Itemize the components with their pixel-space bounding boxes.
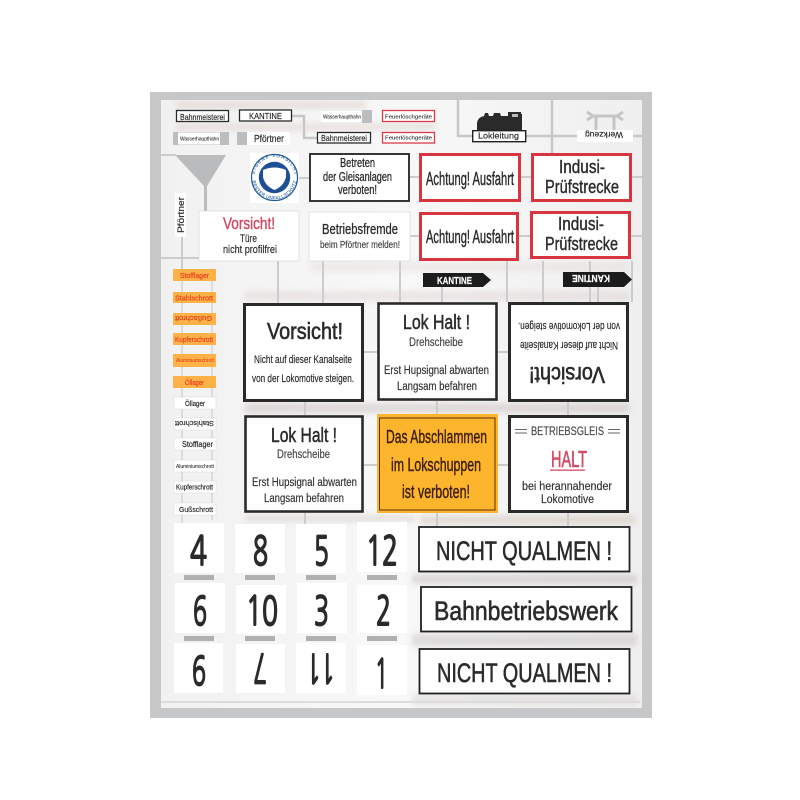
sign: Vorsicht Türe nicht profilfrei bbox=[199, 211, 299, 261]
plate 1 bbox=[357, 645, 407, 695]
small sign: KANTINE: KANTINE bbox=[249, 111, 282, 121]
sign: Lok Halt top: Langsam befahren bbox=[397, 381, 477, 393]
plate 11 inverted bbox=[296, 643, 346, 693]
sign: Betriebsfremde: Betriebsfremde bbox=[322, 221, 398, 238]
sign: Vorsicht Kanalseite: Nicht auf dieser Kanalseite bbox=[254, 354, 352, 366]
plate 6 row three: 6 bbox=[192, 651, 206, 691]
sign: Vorsicht Kanalseite inverted: Nicht auf dieser Kanalseite bbox=[520, 339, 618, 351]
arrow sign: KANTINE: KANTINE bbox=[437, 275, 472, 287]
label: Stofflager white: Stofflager bbox=[182, 440, 213, 449]
label: Stofflager orange: Stofflager bbox=[180, 271, 209, 280]
arrow sign: KANTINE inverted bbox=[563, 272, 632, 287]
sign: Das Abschlammen orange: Das Abschlammen bbox=[386, 427, 487, 447]
column: white labels bbox=[174, 397, 216, 515]
label: Kupferschrott orange: Kupferschrott bbox=[175, 337, 213, 344]
label: Stahlschrott white inverted: Stahlschrott bbox=[174, 419, 214, 428]
bar sign: NICHT QUALMEN top: NICHT QUALMEN ! bbox=[436, 536, 612, 566]
sign: Vorsicht Kanalseite inverted: von der Lokomotive steigen. bbox=[518, 320, 620, 332]
plate 5: 5 bbox=[314, 531, 329, 571]
plate 10: 10 bbox=[246, 591, 278, 631]
bar sign: NICHT QUALMEN lower bbox=[420, 649, 630, 694]
arrow sign: KANTINE bbox=[423, 273, 491, 287]
plate 10 bbox=[236, 585, 286, 634]
plate 12 bbox=[357, 522, 407, 572]
plate 8 bbox=[235, 524, 285, 573]
sign: Lok Halt lower: Lok Halt ! bbox=[271, 425, 337, 447]
label: Aluminiumschrott orange: Aluminiumschrott bbox=[176, 358, 215, 364]
plate 5 bbox=[296, 524, 346, 573]
sign: Lok Halt lower: Langsam befahren bbox=[264, 493, 344, 505]
plate 2 bbox=[357, 585, 407, 633]
sign: Lok Halt top: Erst Hupsignal abwarten bbox=[384, 365, 489, 377]
sign: Vorsicht Türe nicht profilfrei: Vorsicht! bbox=[223, 214, 275, 233]
plate tabs bbox=[184, 575, 397, 641]
plate 11 inverted: 11 bbox=[307, 648, 335, 688]
small sign: Wasserhaupthahn top bbox=[321, 110, 372, 123]
sign: Indusi-Prüfstrecke lower: Prüfstrecke bbox=[545, 234, 618, 254]
icon: locomotive with Lokleitung sign: Lokleitung bbox=[478, 130, 519, 140]
sign: Lok Halt lower bbox=[246, 416, 362, 512]
plate 7 inverted: 7 bbox=[253, 648, 267, 688]
sign: Vorsicht Kanalseite inverted bbox=[510, 304, 628, 400]
funnel gate bbox=[175, 155, 226, 186]
sign: Betreten der Gleisanlagen verboten: der Gleisanlagen bbox=[323, 169, 392, 184]
small sign: Wasserhaupthahn lower bbox=[173, 132, 229, 145]
sign: Das Abschlammen orange bbox=[377, 414, 498, 513]
sign: Indusi-Prüfstrecke lower bbox=[532, 212, 630, 258]
icon: wrench with Werkzeug sign bbox=[577, 112, 633, 142]
small sign: Wasserhaupthahn top: Wasserhaupthahn bbox=[323, 114, 361, 120]
label: Öllager orange: Öllager bbox=[185, 378, 204, 387]
sign: Vorsicht Türe nicht profilfrei: Türe bbox=[240, 233, 257, 245]
sign: Betriebsgleis HALT: HALT bbox=[551, 446, 587, 472]
emblem: Eigene Vorsicht: EIGENE VORSICHT bbox=[252, 154, 298, 174]
sign: Indusi-Prüfstrecke top: Indusi- bbox=[559, 157, 605, 177]
sign: Achtung Ausfahrt lower: Achtung! Ausfahrt bbox=[426, 227, 514, 247]
bar sign: NICHT QUALMEN lower: NICHT QUALMEN ! bbox=[437, 658, 612, 688]
label: Öllager white: Öllager bbox=[185, 400, 206, 408]
vertical sign: Pförtner: Pförtner bbox=[176, 197, 186, 233]
sign: Indusi-Prüfstrecke top: Prüfstrecke bbox=[545, 177, 619, 197]
sign: Betriebsgleis HALT: BETRIEBSGLEIS bbox=[531, 424, 604, 438]
column: orange labels bbox=[173, 269, 216, 388]
sprue runners bbox=[161, 100, 642, 702]
icon: locomotive with Lokleitung sign bbox=[473, 112, 526, 142]
small sign: Bahnmeisterei: Bahnmeisterei bbox=[180, 112, 225, 122]
sign: Betreten der Gleisanlagen verboten: verboten! bbox=[338, 182, 377, 197]
sign: Indusi-Prüfstrecke lower: Indusi- bbox=[558, 214, 604, 234]
label: Gußschrott orange inverted: Gußschrott bbox=[174, 314, 212, 323]
sign: Das Abschlammen orange: ist verboten! bbox=[402, 482, 470, 502]
sign: Betreten der Gleisanlagen verboten: Betreten bbox=[340, 155, 375, 170]
arrow sign: KANTINE inverted: KANTINE bbox=[572, 272, 610, 284]
sign: Lok Halt top: Drehscheibe bbox=[409, 337, 463, 349]
sign: Betreten der Gleisanlagen verboten bbox=[310, 154, 409, 201]
sign: Indusi-Prüfstrecke top bbox=[532, 154, 630, 200]
bar sign: Bahnbetriebswerk: Bahnbetriebswerk bbox=[434, 596, 618, 626]
bar sign: NICHT QUALMEN top bbox=[419, 527, 630, 572]
label: Kupferschrott white: Kupferschrott bbox=[176, 484, 213, 492]
icon: wrench with Werkzeug sign: Werkzeug bbox=[585, 130, 623, 140]
sign: Achtung Ausfahrt top: Achtung! Ausfahrt bbox=[426, 169, 514, 189]
sign: Vorsicht Kanalseite: von der Lokomotive steigen. bbox=[252, 373, 354, 385]
sign: Vorsicht Kanalseite: Vorsicht! bbox=[267, 318, 343, 344]
sign: Lok Halt lower: Erst Hupsignal abwarten bbox=[252, 477, 357, 489]
label: Aluminiumschrott white: Aluminiumschrott bbox=[176, 464, 215, 470]
small sign: Feuerlöschgeräte lower: Feuerlöschgeräte bbox=[385, 136, 432, 142]
plate 1: 1 bbox=[375, 654, 388, 694]
sign: Betriebsfremde bbox=[309, 212, 410, 261]
small sign: KANTINE bbox=[240, 110, 292, 121]
sign: Das Abschlammen orange: im Lokschuppen bbox=[391, 455, 481, 475]
small sign: Wasserhaupthahn lower: Wasserhaupthahn bbox=[180, 136, 219, 142]
bar sign: Bahnbetriebswerk bbox=[421, 587, 632, 632]
sign: Lok Halt top bbox=[378, 304, 496, 400]
label: Stahlschrott orange: Stahlschrott bbox=[175, 294, 214, 302]
sign: Lok Halt top: Lok Halt ! bbox=[403, 312, 470, 334]
label: Gußschrott white: Gußschrott bbox=[179, 505, 214, 514]
plate 2: 2 bbox=[376, 591, 391, 631]
plate 3 bbox=[297, 583, 347, 633]
plate 6 row two bbox=[175, 583, 225, 633]
sign: Betriebsgleis HALT bbox=[510, 416, 628, 512]
plate 3: 3 bbox=[314, 591, 329, 631]
plate 8: 8 bbox=[253, 531, 268, 571]
small sign: Pförtner bbox=[237, 132, 290, 145]
plate 6 row three bbox=[174, 643, 223, 693]
sign: Betriebsgleis HALT: bei herannahender bbox=[522, 481, 612, 493]
sign: Betriebsfremde: beim Pförtner melden! bbox=[320, 239, 400, 251]
vertical sign: Pförtner bbox=[175, 193, 186, 237]
plate 4: 4 bbox=[190, 531, 207, 571]
small sign: Feuerlöschgeräte top bbox=[382, 110, 434, 122]
sign: Achtung Ausfahrt lower bbox=[420, 214, 518, 260]
small sign: Bahnmeisterei lower: Bahnmeisterei bbox=[321, 133, 367, 143]
sprue frame bbox=[150, 92, 652, 718]
plate 4 bbox=[174, 523, 224, 573]
small sign: Pförtner: Pförtner bbox=[254, 134, 285, 145]
plate 7 inverted bbox=[236, 644, 285, 693]
plate 6 row two: 6 bbox=[193, 591, 207, 631]
sign: Vorsicht Kanalseite bbox=[244, 304, 362, 400]
moulding shadows bbox=[176, 101, 637, 705]
sign: Betriebsgleis HALT: Lokomotive bbox=[541, 494, 594, 506]
sign: Achtung Ausfahrt top bbox=[420, 154, 520, 200]
plate 12: 12 bbox=[366, 531, 398, 571]
gate stem bbox=[204, 185, 207, 212]
number plates bbox=[174, 522, 407, 695]
small sign: Feuerlöschgeräte lower bbox=[382, 132, 434, 143]
emblem: Eigene Vorsicht: BESTER UNFALLSCHUTZ bbox=[252, 180, 297, 200]
sign: Vorsicht Türe nicht profilfrei: nicht profilfrei bbox=[223, 244, 277, 256]
sign: Vorsicht Kanalseite inverted: Vorsicht! bbox=[529, 362, 605, 388]
sign: Lok Halt lower: Drehscheibe bbox=[277, 449, 330, 461]
small sign: Feuerlöschgeräte top: Feuerlöschgeräte bbox=[385, 114, 432, 120]
emblem: Eigene Vorsicht bbox=[250, 153, 299, 203]
